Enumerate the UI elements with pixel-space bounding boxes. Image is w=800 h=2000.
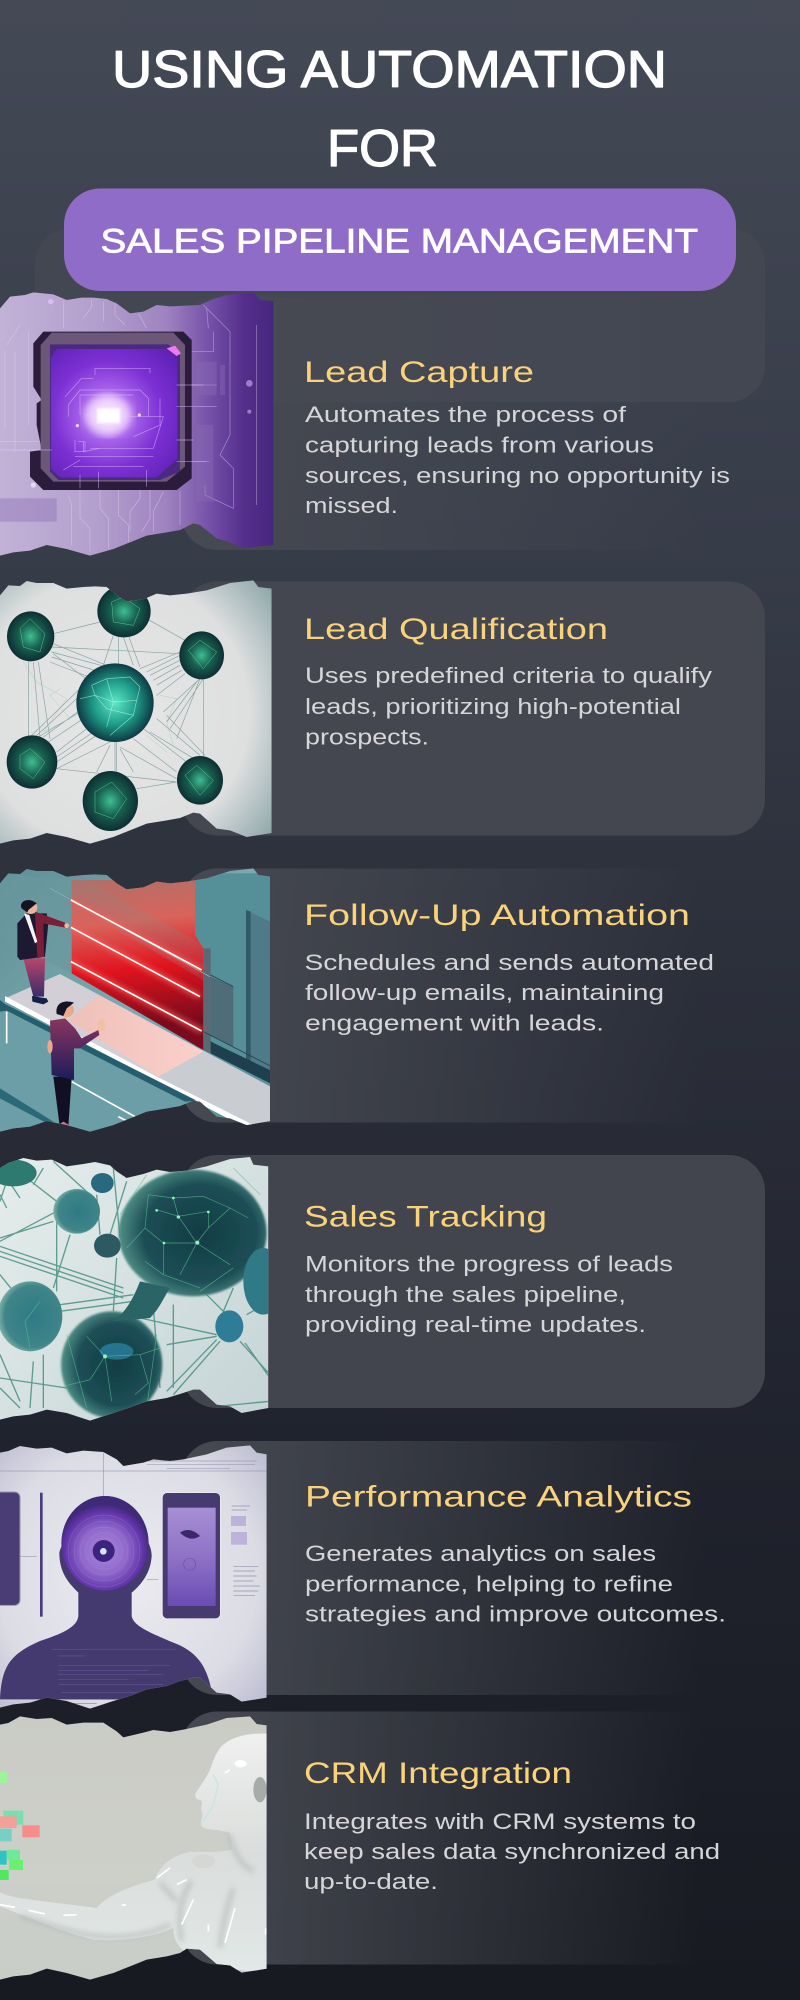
text: follow-up automation description: Schedules and sends automated xyxy=(304,950,714,975)
heading: lead capture: Lead Capture xyxy=(304,356,534,389)
text: sales tracking description: through the sales pipeline, xyxy=(305,1282,626,1307)
text: lead capture description xyxy=(305,402,730,518)
text: lead qualification description: Uses predefined criteria to qualify xyxy=(305,663,712,688)
text: follow-up automation description xyxy=(304,950,714,1036)
panel: crm integration card xyxy=(181,1712,765,1964)
image: head silhouette with phones xyxy=(0,1436,277,1716)
image: two people at a red panel xyxy=(0,860,277,1140)
text: lead capture description: capturing leads from various xyxy=(305,432,654,458)
title: USING AUTOMATION xyxy=(112,41,667,99)
text: performance analytics description: Generates analytics on sales xyxy=(305,1541,656,1566)
text: performance analytics description: strategies and improve outcomes. xyxy=(305,1602,726,1626)
text: crm integration description: up-to-date. xyxy=(304,1869,438,1894)
text: sales tracking description: providing real-time updates. xyxy=(305,1312,646,1337)
text: sales tracking description xyxy=(305,1252,673,1337)
panel: follow-up automation card xyxy=(181,868,765,1122)
banner: sales pipeline management: SALES PIPELINE MANAGEMENT xyxy=(100,222,698,260)
text: follow-up automation description: follow-up emails, maintaining xyxy=(305,980,664,1005)
text: sales tracking description: Monitors the progress of leads xyxy=(305,1252,673,1276)
panel: lead capture card xyxy=(181,297,765,550)
image: neural network spheres xyxy=(0,572,277,852)
title: FOR xyxy=(327,120,438,178)
panel: backing card behind banner xyxy=(35,228,765,402)
panel: sales tracking card xyxy=(181,1155,765,1408)
icon: glossy figure xyxy=(0,1734,273,1972)
heading: lead qualification: Lead Qualification xyxy=(304,613,608,646)
heading: sales tracking: Sales Tracking xyxy=(304,1200,547,1234)
panel: performance analytics card xyxy=(181,1441,765,1695)
text: lead capture description: sources, ensuring no opportunity is xyxy=(305,463,730,488)
icon: standing person xyxy=(17,900,69,1004)
heading: follow-up automation: Follow-Up Automation xyxy=(304,899,690,932)
image: purple circuit chip xyxy=(0,285,277,565)
banner: sales pipeline management xyxy=(64,188,736,291)
heading: performance analytics: Performance Analytics xyxy=(305,1480,692,1514)
text: lead capture description: Automates the process of xyxy=(305,402,627,427)
text: crm integration description xyxy=(304,1809,720,1894)
text: crm integration description: Integrates with CRM systems to xyxy=(304,1809,696,1834)
panel: lead qualification card xyxy=(181,582,765,836)
image: network of teal cells xyxy=(0,1157,268,1420)
image: glossy humanoid figure with data cubes xyxy=(0,1708,277,1988)
text: performance analytics description: performance, helping to refine xyxy=(305,1572,673,1596)
text: lead qualification description: prospects. xyxy=(305,724,429,750)
icon: person with raised hand xyxy=(47,1002,105,1131)
text: lead capture description: missed. xyxy=(305,493,398,518)
text: crm integration description: keep sales data synchronized and xyxy=(304,1839,720,1864)
text: follow-up automation description: engagement with leads. xyxy=(305,1010,604,1036)
icon: data cubes xyxy=(0,1772,40,1880)
text: lead qualification description: leads, prioritizing high-potential xyxy=(305,694,681,719)
text: lead qualification description xyxy=(305,663,712,750)
heading: crm integration: CRM Integration xyxy=(304,1757,572,1790)
title xyxy=(112,41,667,178)
text: performance analytics description xyxy=(305,1541,726,1626)
